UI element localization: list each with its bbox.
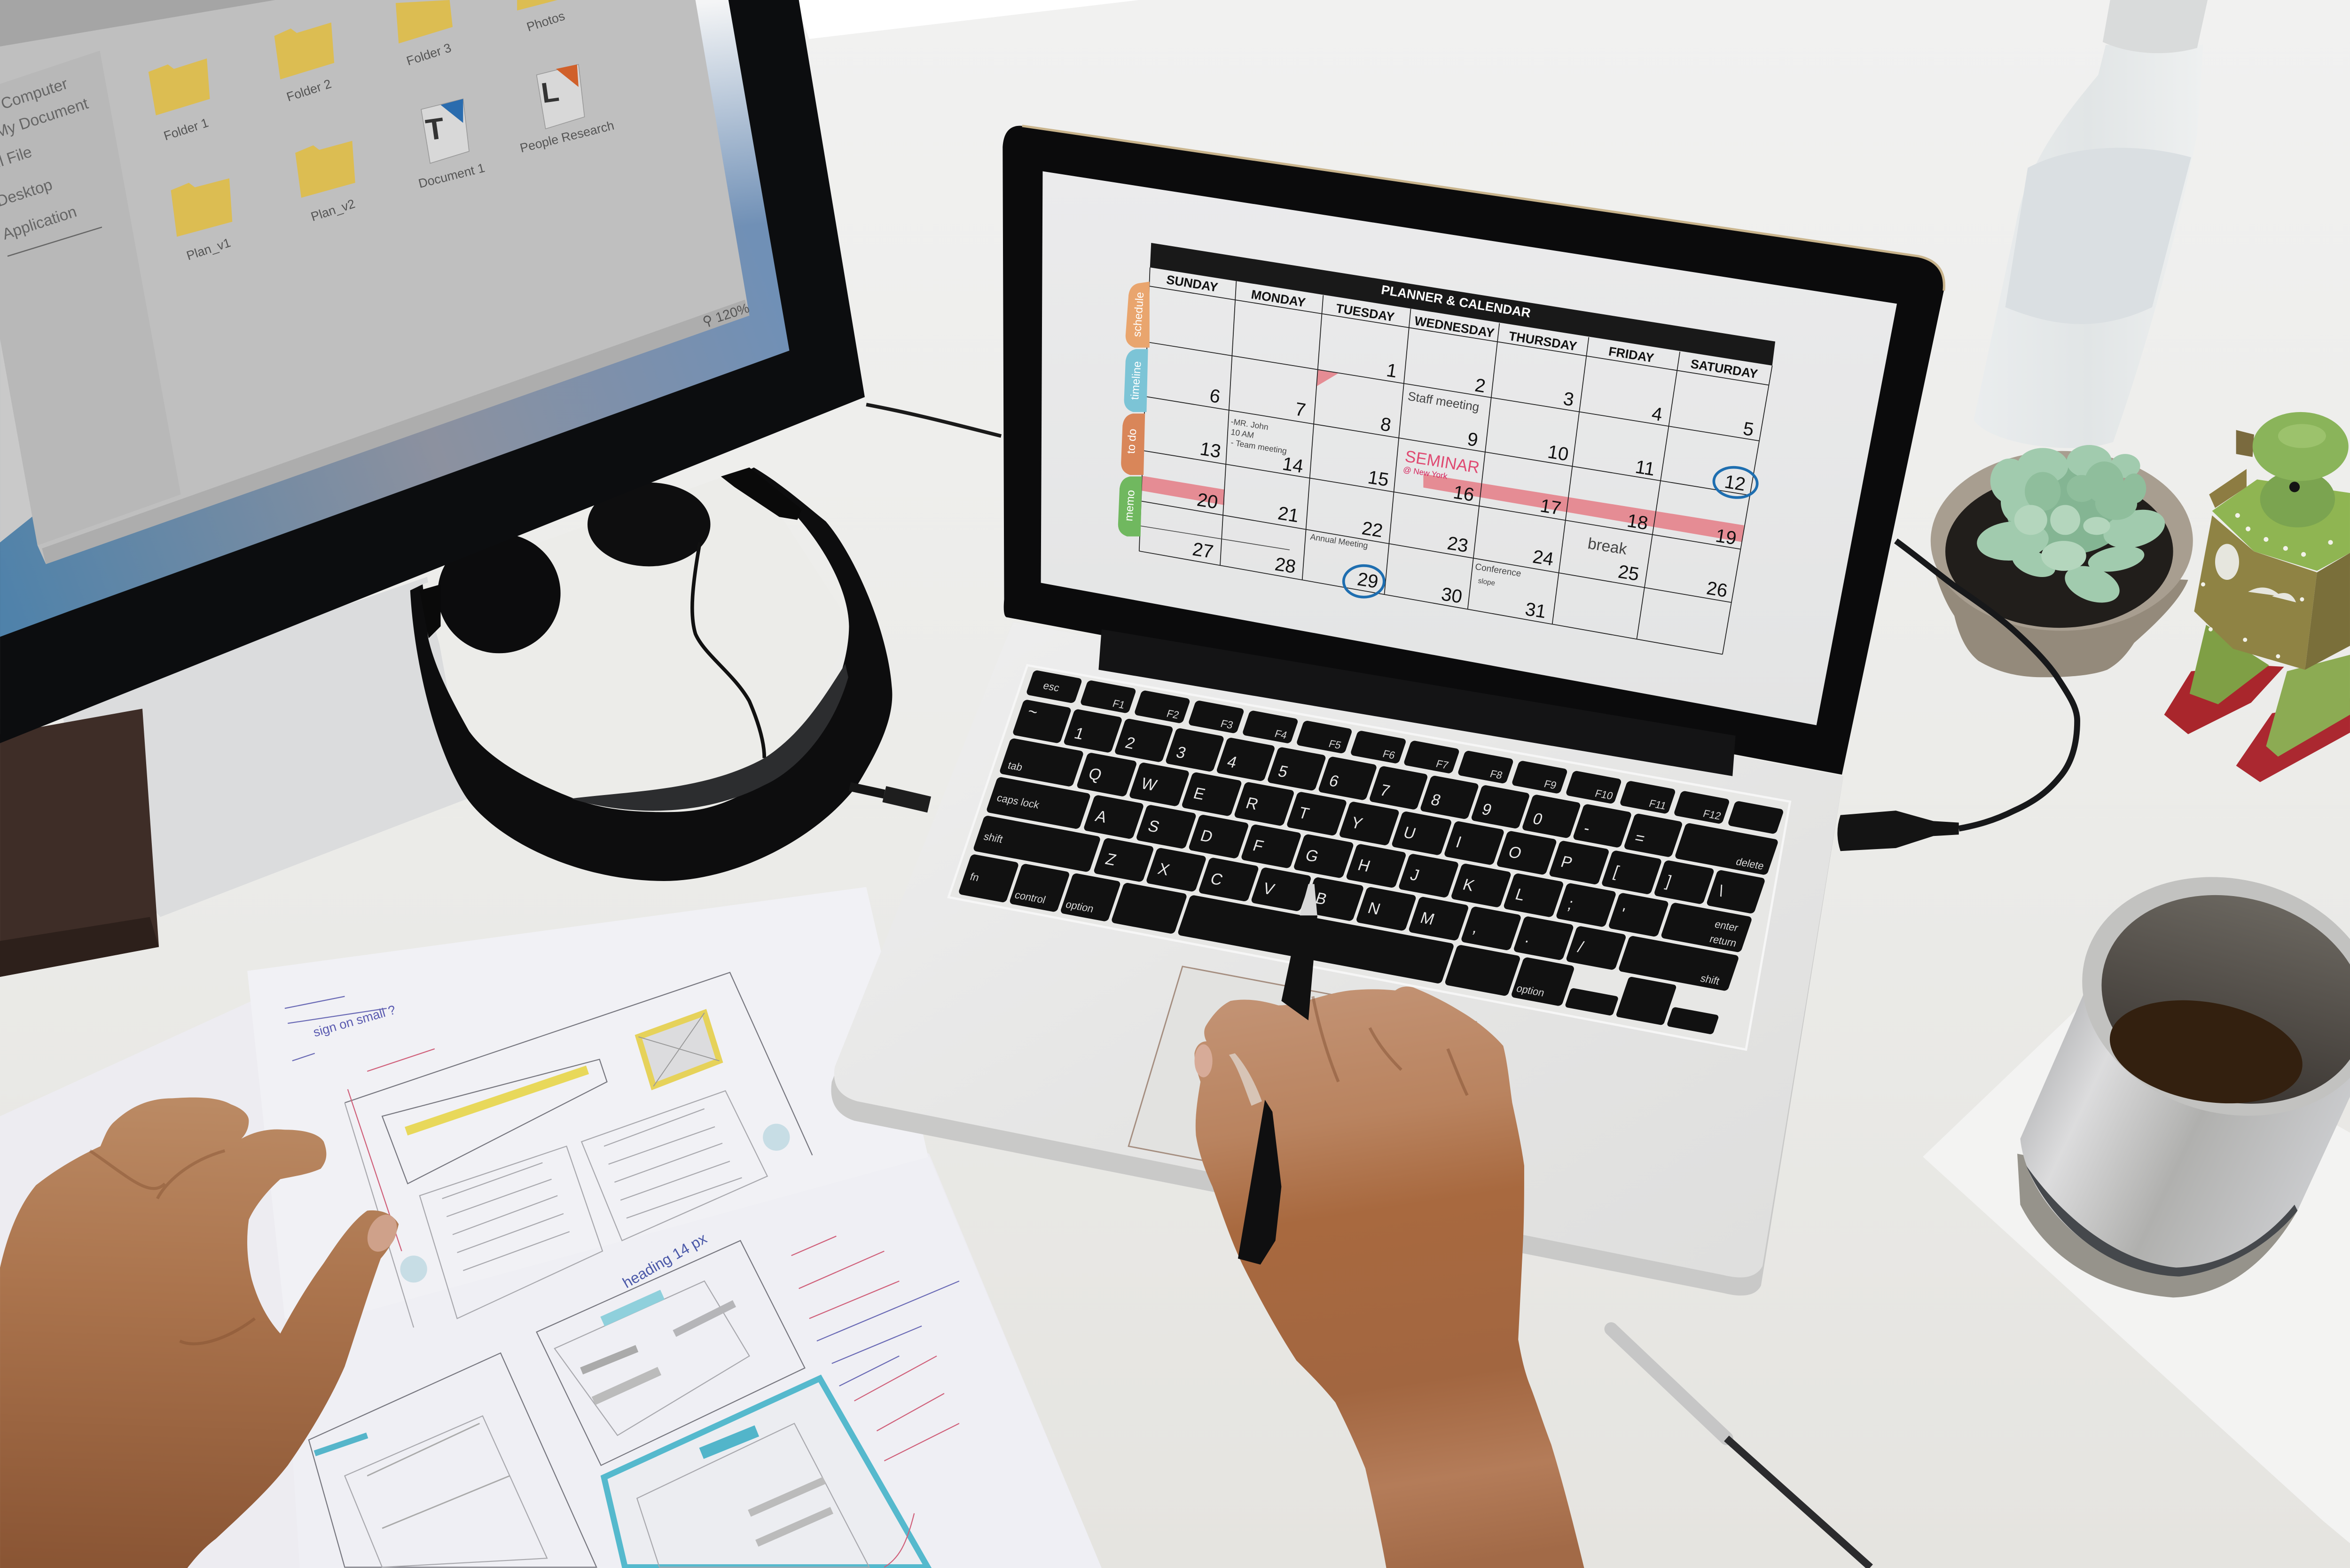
- letter row QWERTY: W: [1139, 774, 1159, 795]
- letter row QWERTY: [: [1611, 863, 1622, 881]
- function row: F10: [1593, 788, 1614, 802]
- function row: [1026, 670, 1784, 835]
- document icon L: L: [539, 75, 561, 109]
- window toolbar: [0, 0, 275, 47]
- wall highlight behind monitor: [794, 0, 1139, 39]
- keyboard well: [948, 665, 1790, 1050]
- date numbers: 16: [1452, 482, 1476, 506]
- handwritten notes: Conference: [1474, 562, 1522, 579]
- tab: timeline: timeline: [1128, 361, 1144, 400]
- number row: 3: [1174, 743, 1188, 762]
- weekday headings: MONDAY: [1250, 287, 1307, 310]
- coffee cup: [2017, 845, 2350, 1297]
- function row: F5: [1327, 738, 1343, 751]
- letter row QWERTY: U: [1401, 823, 1418, 843]
- robot clock: [2215, 544, 2239, 580]
- number row: 1: [1072, 724, 1087, 743]
- blue circle on 29: [1344, 566, 1384, 597]
- wallet: [0, 709, 159, 977]
- folder labels: [162, 9, 616, 263]
- blue circle on 12: [1712, 465, 1759, 499]
- letter row QWERTY: \: [1716, 882, 1726, 900]
- letter row ZXCV: [972, 815, 1739, 991]
- finger creases: [1313, 997, 1467, 1095]
- date numbers: 1: [1385, 360, 1399, 382]
- wireframe sketch: form page: [537, 1230, 805, 1466]
- laptop screen: [1041, 171, 1897, 725]
- left hand: [0, 1098, 403, 1568]
- wireframe sketch: form page: heading 14 px: [619, 1230, 710, 1291]
- laptop base: [831, 622, 1843, 1295]
- folder labels: Folder 3: [405, 40, 453, 68]
- bottom row: [958, 854, 1726, 1035]
- letter row ASDF: S: [1145, 817, 1162, 836]
- letter row ASDF: G: [1303, 846, 1321, 866]
- cup rim: [2055, 845, 2350, 1148]
- headband padding: [571, 664, 848, 811]
- number row: 2: [1123, 734, 1137, 753]
- date numbers: 15: [1366, 467, 1390, 491]
- robot body front: [2194, 515, 2317, 670]
- folder labels: Plan_v1: [185, 235, 232, 263]
- number row: 7: [1378, 781, 1392, 800]
- weekday headings: SATURDAY: [1690, 357, 1759, 381]
- date numbers: 11: [1634, 456, 1656, 480]
- letter row ZXCV: ,: [1471, 919, 1480, 936]
- tab: to do: to do: [1125, 429, 1139, 454]
- thumbnail: [362, 1210, 403, 1256]
- monitor: [0, 0, 865, 743]
- monitor glass: [0, 0, 790, 637]
- play icons: [763, 1124, 790, 1151]
- letter row QWERTY: T: [1296, 804, 1311, 823]
- headphones: [410, 468, 892, 881]
- letter row ASDF: A: [1093, 807, 1109, 827]
- handwritten note: sign on small ?: [312, 1002, 397, 1039]
- handwritten notes: Staff meeting: [1407, 389, 1480, 414]
- letter row QWERTY: E: [1191, 784, 1207, 804]
- date numbers: 28: [1273, 554, 1297, 577]
- letter row ZXCV: V: [1261, 880, 1277, 899]
- letter row ASDF: L: [1513, 885, 1528, 904]
- letter row ZXCV: M: [1418, 909, 1437, 928]
- monitor bezel: [0, 0, 865, 743]
- letter row QWERTY: P: [1559, 853, 1574, 872]
- letter row ZXCV: N: [1365, 899, 1383, 918]
- window sidebar: [0, 51, 181, 546]
- succulent leaves: [1975, 445, 2169, 609]
- calendar grid: [1139, 267, 1772, 655]
- robot shoulders: [2212, 479, 2350, 571]
- cup base ring: [2017, 1154, 2297, 1297]
- number row: 9: [1480, 800, 1494, 819]
- wireframe sketch: teal page: [604, 1379, 928, 1567]
- handwritten notes: 10 AM: [1230, 427, 1255, 440]
- potted succulent: [1931, 445, 2193, 677]
- number row: [1012, 699, 1779, 875]
- letter row ASDF: F: [1251, 836, 1266, 856]
- bottom row: option: [1515, 983, 1546, 999]
- document icon T: T: [423, 111, 446, 147]
- letter row QWERTY: tab: [1006, 759, 1024, 773]
- robot bolt: [2236, 430, 2254, 457]
- document icon T: [421, 99, 469, 164]
- letter row ZXCV: B: [1313, 889, 1329, 908]
- date numbers: 7: [1293, 399, 1307, 421]
- date numbers: [1191, 360, 1755, 623]
- date numbers: 19: [1714, 525, 1738, 549]
- robot arm: [2209, 469, 2247, 508]
- handwritten notes: - Team meeting: [1230, 437, 1287, 456]
- function row: F1: [1111, 697, 1127, 711]
- letter row QWERTY: R: [1244, 794, 1261, 813]
- date numbers: 13: [1198, 438, 1222, 462]
- date numbers: 2: [1473, 375, 1487, 397]
- letter row QWERTY: Y: [1348, 814, 1365, 833]
- function row: F11: [1647, 797, 1668, 812]
- function row: F7: [1434, 757, 1450, 771]
- ear cup left: [438, 533, 561, 653]
- letter row ASDF: return: [1708, 933, 1738, 949]
- left text block: [420, 1146, 603, 1318]
- folder labels: Document 1: [417, 161, 486, 191]
- date numbers: 20: [1196, 489, 1219, 513]
- tab: schedule: schedule: [1131, 292, 1146, 337]
- handwritten notes: -MR. John: [1230, 417, 1269, 432]
- date numbers: 29: [1356, 569, 1380, 593]
- tab: to do: [1121, 413, 1145, 475]
- number row: 5: [1276, 762, 1290, 781]
- bottle cap: [2103, 0, 2208, 53]
- number row: 4: [1225, 753, 1239, 772]
- pot rim: [1931, 451, 2193, 631]
- letter row ZXCV: X: [1156, 860, 1172, 879]
- headphone plug: [850, 787, 929, 804]
- handwritten notes: @ New York: [1402, 465, 1448, 481]
- number row: =: [1632, 829, 1647, 848]
- robot body side: [2305, 553, 2350, 670]
- function row: F4: [1273, 728, 1289, 741]
- letter row ASDF: H: [1355, 856, 1372, 875]
- monitor stand base: [60, 577, 468, 917]
- zoom level: ⚲ 120%: [701, 301, 751, 330]
- weekday headings: THURSDAY: [1508, 329, 1578, 353]
- right text block: [581, 1091, 768, 1240]
- calendar header bar: [1150, 243, 1775, 366]
- letter row QWERTY: ]: [1663, 873, 1674, 890]
- date numbers: 17: [1539, 495, 1563, 519]
- letter row QWERTY: I: [1454, 833, 1464, 851]
- date numbers: 18: [1626, 510, 1649, 534]
- function row: esc: [1042, 679, 1061, 694]
- calendar side tabs: [1118, 281, 1150, 537]
- ear cup right: [588, 483, 710, 566]
- calendar title: PLANNER & CALENDAR: [1380, 282, 1532, 320]
- bottle water: [2005, 148, 2191, 324]
- robot right foot: [2236, 698, 2350, 782]
- date numbers: 5: [1742, 418, 1755, 440]
- tab: schedule: [1126, 281, 1150, 348]
- letter row ZXCV: C: [1208, 870, 1225, 889]
- date numbers: 8: [1379, 413, 1393, 436]
- trackpad: [1128, 967, 1476, 1201]
- letter row ASDF: ;: [1566, 895, 1575, 913]
- date numbers: 24: [1531, 546, 1555, 570]
- folder labels: Plan_v2: [309, 196, 357, 224]
- function row: F12: [1701, 807, 1723, 822]
- robot dots: [2201, 513, 2333, 658]
- soil: [1945, 475, 2173, 628]
- number row: 0: [1530, 810, 1545, 828]
- bottom row: control: [1013, 889, 1047, 906]
- date numbers: 3: [1562, 388, 1575, 410]
- date numbers: 4: [1650, 403, 1664, 425]
- date numbers: 26: [1705, 577, 1729, 601]
- calendar app: [1118, 243, 1775, 655]
- letter row QWERTY: [999, 738, 1766, 914]
- number row: delete: [1734, 856, 1766, 872]
- date numbers: 30: [1440, 584, 1464, 608]
- highlighted events: [1142, 370, 1744, 542]
- robot cap: [2253, 412, 2349, 481]
- weekday headings: TUESDAY: [1335, 301, 1395, 324]
- tab: timeline: [1124, 349, 1148, 412]
- red margin line: [348, 1049, 435, 1251]
- paper sheets: [0, 887, 1102, 1568]
- headband bracket: [721, 468, 802, 520]
- date numbers: 31: [1524, 599, 1548, 623]
- weekday headings: [1166, 273, 1759, 381]
- red annotations: [791, 1236, 959, 1567]
- function row: F6: [1381, 748, 1397, 761]
- letter row ASDF: caps lock: [995, 792, 1042, 811]
- letter row ZXCV: shift: [1699, 972, 1721, 987]
- finger creases: [90, 1151, 255, 1344]
- robot left foot: [2164, 665, 2284, 734]
- function row: F2: [1165, 708, 1181, 721]
- sidebar labels: [0, 75, 91, 243]
- folders: [149, 0, 557, 237]
- letter row ZXCV: /: [1575, 938, 1586, 956]
- folder labels: Folder 2: [285, 77, 333, 104]
- coffee: [2101, 986, 2311, 1117]
- letter row ASDF: J: [1408, 866, 1422, 884]
- handwritten notes: SEMINAR: [1404, 447, 1481, 477]
- keyboard keys: [958, 670, 1789, 1035]
- function row: F3: [1219, 718, 1235, 731]
- cup body: [2020, 959, 2350, 1277]
- monitor cable: [866, 405, 1001, 436]
- weekday headings: SUNDAY: [1166, 273, 1219, 295]
- folder labels: Photos: [525, 9, 566, 34]
- date numbers: 6: [1208, 385, 1222, 407]
- date numbers: 23: [1446, 533, 1470, 556]
- weekday headings: WEDNESDAY: [1413, 314, 1496, 340]
- date numbers: 27: [1191, 539, 1215, 562]
- handwritten notes: Annual Meeting: [1309, 532, 1369, 550]
- thumb and finger gap: [1229, 1053, 1262, 1106]
- water bottle: [1974, 0, 2208, 448]
- letter row ASDF: ': [1618, 905, 1627, 923]
- date numbers: 14: [1281, 453, 1305, 477]
- wireframe sketch: bottom left page: [309, 1353, 596, 1567]
- pot: [1933, 568, 2188, 677]
- file window: [0, 0, 749, 564]
- headphone wire: [692, 542, 764, 758]
- headphone interior desk: [423, 468, 854, 817]
- right cable: [1896, 541, 2077, 828]
- robot head: [2260, 470, 2335, 527]
- letter row ZXCV: shift: [982, 830, 1004, 845]
- letter row ASDF: K: [1460, 876, 1477, 895]
- letter row QWERTY: O: [1506, 843, 1524, 863]
- right hand: [1194, 986, 1584, 1568]
- function row: F8: [1488, 768, 1504, 781]
- robot right leg: [2266, 655, 2350, 757]
- letter row ZXCV: Z: [1103, 850, 1119, 869]
- handwritten notes: slope: [1477, 577, 1496, 587]
- laptop hinge: [1098, 629, 1736, 776]
- weekday headings: FRIDAY: [1607, 344, 1655, 365]
- folder labels: Folder 1: [162, 116, 210, 143]
- tab: memo: memo: [1122, 490, 1137, 522]
- letter row ASDF: [986, 776, 1753, 953]
- number row: 6: [1327, 772, 1341, 791]
- letter row ZXCV: .: [1523, 928, 1533, 946]
- document icon L: [537, 64, 585, 129]
- date numbers: 21: [1277, 503, 1300, 526]
- wireframe sketch: top page: [285, 972, 812, 1327]
- function row: F9: [1543, 778, 1558, 791]
- handwritten notes: break: [1587, 535, 1628, 558]
- pencil arrow: [1141, 526, 1290, 550]
- bottom row: fn: [969, 871, 981, 883]
- letter row ASDF: D: [1198, 827, 1215, 846]
- yellow image box: [638, 1013, 720, 1086]
- sidebar labels: Computer: [0, 75, 70, 113]
- thumb nail: [1194, 1045, 1213, 1077]
- handwritten notes: [1230, 389, 1628, 587]
- robot gauges: [2248, 587, 2296, 602]
- date numbers: 25: [1617, 561, 1640, 585]
- tab: memo: [1118, 476, 1142, 537]
- number row: 8: [1429, 791, 1443, 810]
- date numbers: 10: [1546, 441, 1570, 465]
- bottom row: option: [1064, 898, 1095, 915]
- letter row ASDF: enter: [1713, 918, 1740, 934]
- laptop lid: [1003, 126, 1944, 776]
- black pen in hand: [1238, 884, 1317, 1264]
- teal highlight: [603, 1295, 662, 1321]
- date numbers: 9: [1466, 429, 1480, 451]
- silver pen: [1611, 1329, 1871, 1567]
- letter row QWERTY: Q: [1086, 765, 1104, 784]
- robot left leg: [2190, 625, 2269, 704]
- left hook: [420, 585, 441, 638]
- headphone band: [410, 468, 892, 881]
- yellow highlight bar: [406, 1070, 588, 1131]
- cable connector: [1837, 811, 1959, 851]
- napkin: [1923, 989, 2350, 1543]
- cup interior: [2078, 866, 2350, 1132]
- sidebar labels: Application: [0, 203, 79, 243]
- number row: -: [1582, 819, 1592, 837]
- succulent heart: [2005, 459, 2131, 554]
- back window: [0, 0, 60, 542]
- number row: ~: [1025, 702, 1040, 721]
- toy robot: [2164, 412, 2350, 782]
- date numbers: 22: [1360, 518, 1384, 541]
- robot eye: [2289, 482, 2300, 492]
- folder labels: People Research: [518, 118, 616, 155]
- date numbers: 12: [1723, 471, 1747, 495]
